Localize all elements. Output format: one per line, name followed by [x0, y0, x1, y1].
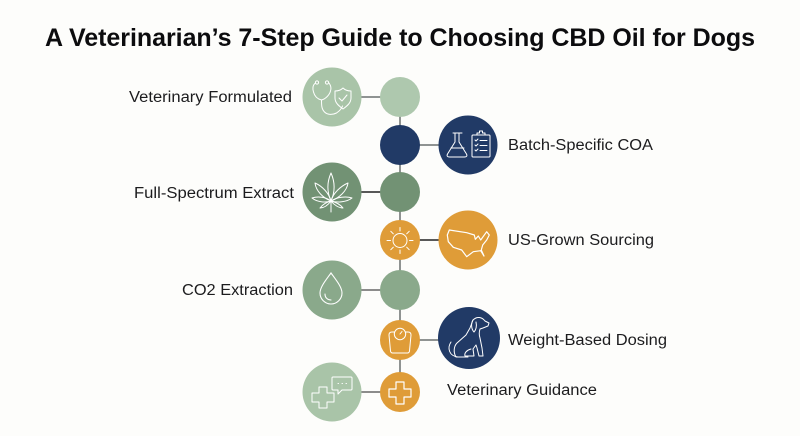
step 1: Veterinary Formulated	[129, 68, 420, 126]
label: US-Grown Sourcing	[508, 232, 654, 249]
icon: sun	[387, 228, 413, 254]
step 7: Veterinary Guidance	[302, 362, 597, 422]
step 3: Full-Spectrum Extract	[134, 162, 420, 222]
icon: plus	[389, 382, 411, 404]
icon: stethoscope and shield	[313, 81, 351, 114]
label: CO2 Extraction	[182, 282, 293, 299]
icon: flask and clipboard	[447, 131, 490, 157]
label: Full-Spectrum Extract	[134, 185, 295, 202]
icon: sitting dog	[449, 317, 489, 357]
label: Veterinary Guidance	[447, 382, 597, 399]
icon: US map	[447, 230, 489, 257]
icon: plus and chat bubble	[312, 377, 352, 408]
step 5: CO2 Extraction	[182, 260, 420, 320]
title: A Veterinarian’s 7-Step Guide to Choosing CBD Oil for Dogs	[45, 24, 755, 52]
step 4: US-Grown Sourcing	[380, 210, 654, 270]
icon: oil drop	[320, 273, 342, 304]
label: Batch-Specific COA	[508, 137, 654, 154]
label: Weight-Based Dosing	[508, 332, 667, 349]
step 2: Batch-Specific COA	[380, 116, 654, 174]
icon: scale	[389, 328, 411, 353]
spine connector	[399, 97, 401, 392]
label: Veterinary Formulated	[129, 89, 292, 106]
icon: hemp leaf	[312, 173, 352, 212]
step 6: Weight-Based Dosing	[380, 307, 667, 369]
